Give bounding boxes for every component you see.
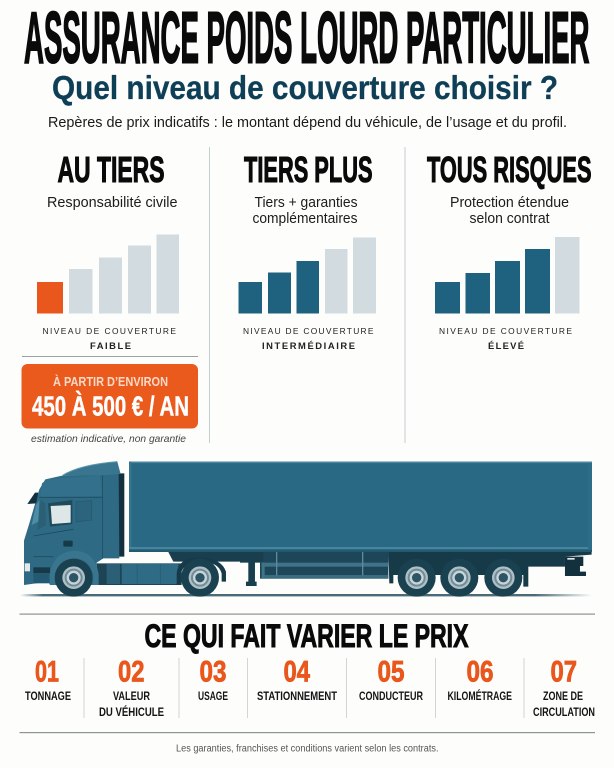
coverage level: élevé: ÉLEVÉ	[488, 340, 524, 351]
factor 04: STATIONNEMENT	[257, 689, 338, 703]
factor 07: ZONE DE	[543, 689, 583, 703]
price factors	[25, 656, 595, 719]
factor 07	[533, 656, 595, 719]
description: tiers plus: complémentaires	[252, 211, 358, 227]
footnote: Les garanties, franchises et conditions varient selon les contrats.	[176, 744, 438, 754]
factor 07: 07	[550, 656, 577, 688]
trailer box	[129, 462, 592, 552]
description: au tiers: Responsabilité civile	[47, 195, 178, 211]
coverage level: élevé	[439, 326, 572, 351]
bar chart: tous risques	[435, 237, 580, 314]
factor 02	[99, 656, 164, 719]
coverage level: faible: FAIBLE	[90, 340, 131, 351]
coverage level: intermédiaire: INTERMÉDIAIRE	[262, 340, 355, 351]
coverage level: faible: NIVEAU DE COUVERTURE	[42, 326, 176, 336]
factor 06: KILOMÉTRAGE	[448, 688, 512, 703]
trailer chassis	[240, 552, 592, 597]
coverage level: intermédiaire	[243, 326, 374, 351]
panel: tous risques	[427, 149, 592, 351]
bar chart: tiers plus	[238, 238, 376, 314]
illustration: truck	[20, 462, 592, 597]
factor 05: CONDUCTEUR	[359, 689, 423, 703]
factor 02: DU VÉHICULE	[99, 704, 164, 719]
coverage level: intermédiaire: NIVEAU DE COUVERTURE	[243, 326, 374, 336]
factor 04: 04	[284, 656, 310, 688]
factor 06: 06	[466, 656, 494, 688]
price note: estimation indicative, non garantie	[31, 433, 186, 445]
heading: tiers plus: TIERS PLUS	[244, 149, 372, 190]
panel: au tiers	[22, 149, 198, 445]
factor 07: CIRCULATION	[533, 705, 595, 719]
factor 03: USAGE	[198, 689, 228, 703]
description: tous risques: selon contrat	[470, 211, 550, 227]
description: tous risques	[450, 195, 569, 227]
bar chart: au tiers	[37, 234, 179, 314]
factor 01: 01	[35, 656, 59, 688]
price box: 450 À 500 € / AN	[32, 390, 189, 422]
factor 03	[198, 656, 228, 703]
subtitle: Quel niveau de couverture choisir ?	[52, 69, 558, 106]
coverage level: faible	[42, 326, 176, 351]
factor 01: TONNAGE	[25, 689, 71, 703]
factor 05: 05	[378, 656, 404, 688]
coverage level: élevé: NIVEAU DE COUVERTURE	[439, 326, 572, 336]
intro text: Repères de prix indicatifs : le montant dépend du véhicule, de l’usage et du profil.	[48, 114, 567, 131]
factor 06	[448, 656, 512, 703]
factor 01	[25, 656, 71, 703]
tractor cab	[24, 462, 263, 597]
factor 04	[257, 656, 338, 703]
description: tiers plus: Tiers + garanties	[254, 195, 358, 211]
heading: au tiers: AU TIERS	[58, 149, 164, 190]
description: tiers plus	[252, 195, 358, 227]
factor 03: 03	[200, 656, 226, 688]
factor 05	[359, 656, 423, 703]
price box: À PARTIR D’ENVIRON	[53, 374, 168, 389]
factor 02: VALEUR	[113, 689, 150, 703]
price box	[22, 364, 198, 428]
description: tous risques: Protection étendue	[450, 195, 569, 211]
factor 02: 02	[118, 656, 144, 688]
panel: tiers plus	[238, 149, 376, 351]
section heading: CE QUI FAIT VARIER LE PRIX	[144, 618, 469, 654]
